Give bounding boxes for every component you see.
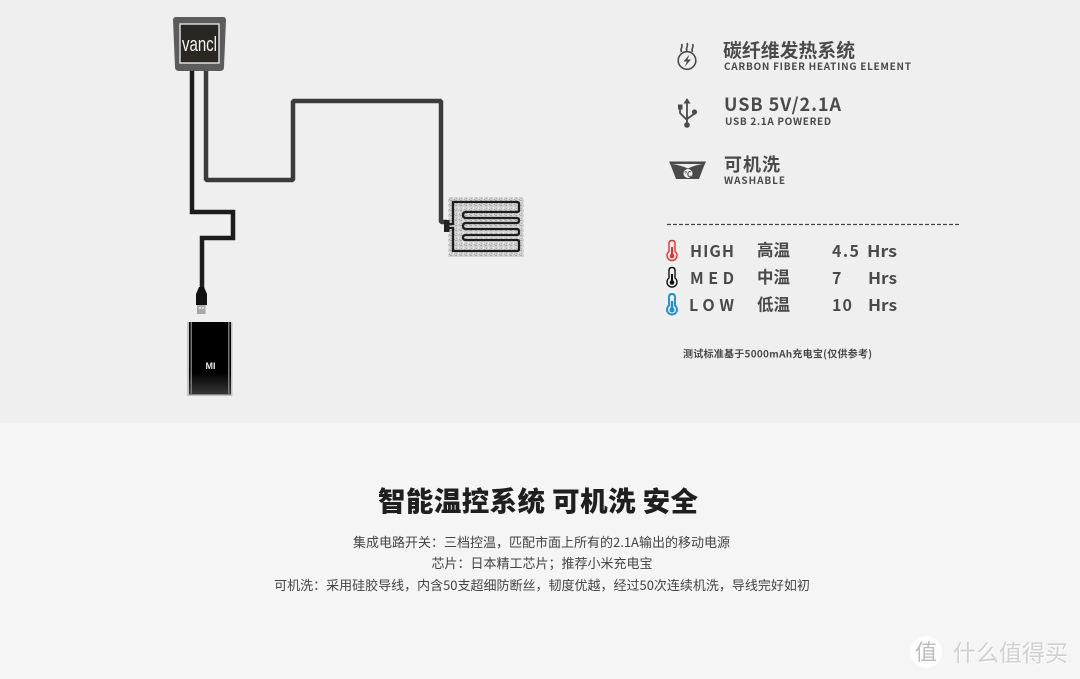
heating element [444, 197, 524, 257]
power bank: Mi [187, 322, 232, 396]
description text: 芯片：日本精工芯片；推荐小米充电宝 [431, 553, 653, 572]
feature: washable: WASHABLE [724, 172, 785, 187]
row: low [689, 292, 897, 316]
row: high: 高温 [757, 237, 790, 261]
row: med: 7 [832, 265, 841, 289]
icon: thermometer high [667, 240, 677, 260]
dashed divider [667, 224, 961, 226]
row: high [690, 237, 897, 262]
row: high: Hrs [867, 238, 897, 262]
icon: thermometer med [667, 268, 677, 287]
row: med: Hrs [868, 265, 897, 289]
row: low: 低温 [757, 292, 790, 316]
watermark: 什么值得买 [953, 634, 1068, 668]
power bank: Mi: MI [206, 361, 216, 371]
row: high: 4.5 [832, 238, 859, 262]
feature: usb: USB 2.1A POWERED [725, 113, 831, 128]
feature: washable: 可机洗 [724, 151, 780, 177]
feature: carbon fiber [723, 36, 911, 73]
row: high: HIGH [690, 238, 734, 262]
icon: usb [678, 98, 697, 128]
icon: carbon fiber heat [678, 43, 696, 69]
controller: vancl: vancl [182, 34, 217, 56]
panel: description background [0, 423, 1080, 679]
row: low: 10 [832, 292, 852, 316]
feature: usb [724, 91, 841, 128]
footnote: 测试标准基于5000mAh充电宝(仅供参考) [683, 346, 872, 360]
description text [274, 532, 810, 594]
feature: usb: USB 5V/2.1A [724, 91, 841, 117]
feature: carbon fiber: CARBON FIBER HEATING ELEMENT [724, 58, 911, 73]
watermark: 什么值得买 [954, 635, 1069, 669]
grey cable to heating element [206, 70, 447, 222]
feature: washable [724, 151, 785, 187]
icon: thermometer low [667, 294, 677, 314]
heading: 智能温控系统 可机洗 安全 [378, 479, 698, 519]
description text: 可机洗：采用硅胶导线，内含50支超细防断丝，韧度优越，经过50次连续机洗，导线完好如初 [274, 575, 810, 594]
row: med [690, 264, 897, 289]
icon: washable [669, 162, 706, 179]
usb plug [196, 287, 207, 314]
description text: 集成电路开关：三档控温，匹配市面上所有的2.1A输出的移动电源 [353, 532, 730, 551]
icon: washable: ℃ [684, 170, 692, 178]
watermark: 值 [915, 635, 937, 667]
row: med: MED [690, 265, 734, 289]
black cable to USB [192, 70, 233, 288]
feature: carbon fiber: 碳纤维发热系统 [723, 36, 855, 63]
panel: product diagram background [0, 0, 1080, 423]
row: med: 中温 [757, 264, 790, 288]
controller: vancl [173, 17, 226, 71]
row: low: LOW [689, 292, 734, 316]
row: low: Hrs [868, 292, 897, 316]
